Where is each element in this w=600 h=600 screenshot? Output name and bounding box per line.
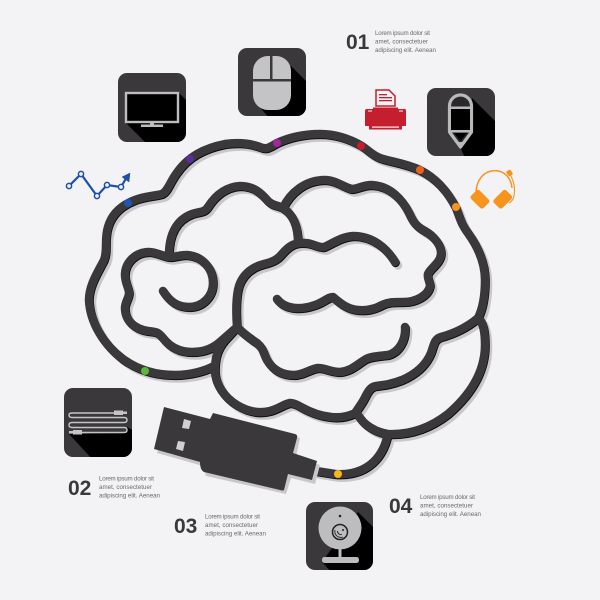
text block 03: adipiscing elit. Aenean xyxy=(205,530,267,538)
text block 03: amet, consectetuer xyxy=(205,522,258,529)
icon: pencil xyxy=(427,88,495,156)
text block 02: 02 xyxy=(68,477,91,500)
icon: headphones xyxy=(470,169,515,210)
icon: cables xyxy=(64,388,136,460)
text block 01: adipiscing elit. Aenean xyxy=(375,47,437,54)
text block 04: Lorem ipsum dolor sit xyxy=(420,494,475,501)
icon: webcam xyxy=(306,502,373,570)
text block 03 xyxy=(174,514,267,538)
text block 04: amet, consectetuer xyxy=(420,502,473,510)
text block 01: Lorem ipsum dolor sit xyxy=(375,30,430,37)
USB plug xyxy=(154,407,320,494)
coloured cable dots xyxy=(124,139,460,478)
text block 02: adipiscing elit. Aenean xyxy=(99,492,161,500)
brain-shaped cable xyxy=(89,134,488,478)
text block 02: Lorem ipsum dolor sit xyxy=(99,476,154,482)
icon: printer xyxy=(365,90,406,130)
text block 02 xyxy=(68,476,161,500)
icon: mouse xyxy=(238,48,306,116)
text block 01: 01 xyxy=(346,31,370,54)
text block 01 xyxy=(346,30,437,54)
text block 03: 03 xyxy=(174,515,197,538)
text block 01: amet, consectetuer xyxy=(375,38,428,46)
text block 03: Lorem ipsum dolor sit xyxy=(205,514,260,520)
icon: monitor xyxy=(118,73,186,142)
text block 04 xyxy=(389,494,482,518)
text block 04: 04 xyxy=(389,495,413,518)
text block 04: adipiscing elit. Aenean xyxy=(420,511,482,518)
icon: line chart xyxy=(66,171,130,199)
text block 02: amet, consectetuer xyxy=(99,484,152,491)
